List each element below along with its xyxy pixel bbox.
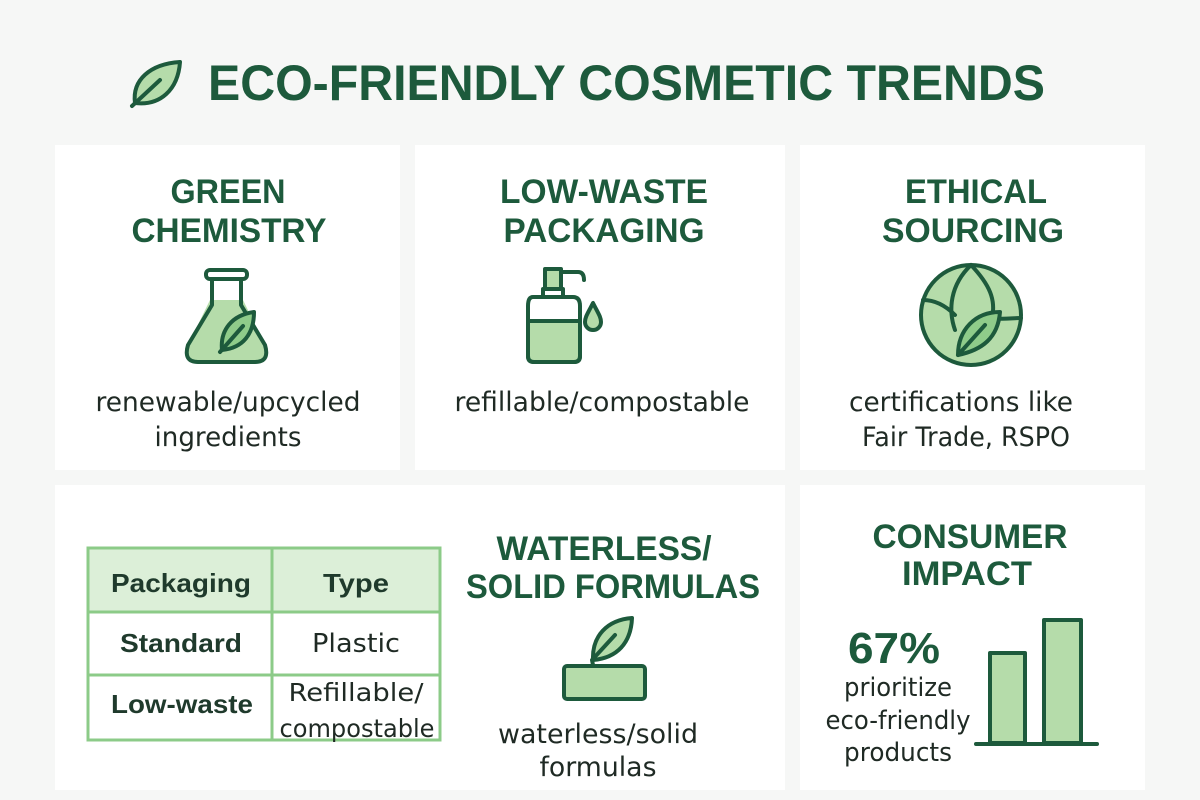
- panel: consumer impact: [800, 485, 1145, 790]
- heading: ethical sourcing: SOURCING: [882, 212, 1064, 250]
- text: low-waste: refillable/compostable: [454, 387, 750, 418]
- panel: ethical sourcing: [800, 145, 1145, 470]
- heading: consumer impact: IMPACT: [902, 555, 1032, 593]
- text: prioritize: eco-friendly: [826, 706, 970, 736]
- text: prioritize: prioritize: [844, 673, 952, 703]
- heading: green chemistry: GREEN: [170, 173, 286, 211]
- panel: green chemistry: [55, 145, 400, 470]
- table: packaging comparison: Standard: [120, 628, 242, 658]
- heading: waterless: WATERLESS/: [496, 530, 712, 568]
- table: packaging comparison: Type: [323, 568, 389, 598]
- icon: title leaf: [132, 62, 180, 106]
- heading: green chemistry: CHEMISTRY: [132, 212, 327, 250]
- text: prioritize: products: [844, 738, 952, 768]
- title: ECO-FRIENDLY COSMETIC TRENDS: [208, 55, 1045, 111]
- icon: solid bar with leaf: [564, 618, 645, 699]
- panel: low-waste packaging: [415, 145, 785, 470]
- text: green chemistry: renewable/upcycled: [96, 387, 360, 418]
- icon: flask with leaf: [187, 270, 266, 362]
- heading: waterless: SOLID FORMULAS: [466, 568, 760, 606]
- table: packaging comparison: Plastic: [312, 629, 400, 659]
- text: waterless: waterless/solid: [498, 719, 698, 750]
- table: packaging comparison: Refillable/: [288, 678, 424, 707]
- table: packaging comparison: Packaging: [111, 568, 251, 598]
- table: packaging comparison: compostable: [280, 714, 434, 743]
- text: waterless: formulas: [540, 752, 656, 783]
- heading: green chemistry: [132, 173, 327, 250]
- table: packaging comparison: [88, 548, 440, 743]
- icon: globe with leaf: [921, 265, 1021, 365]
- text: waterless: [498, 719, 698, 783]
- text: ethical: [849, 387, 1073, 453]
- icon: pump bottle: [528, 269, 601, 362]
- heading: ethical sourcing: [882, 173, 1064, 250]
- table: packaging comparison: Low-waste: [111, 689, 253, 719]
- heading: ethical sourcing: ETHICAL: [905, 173, 1047, 211]
- text: ethical: certifications like: [849, 387, 1073, 418]
- stat: 67%: 67%: [848, 624, 940, 673]
- text: prioritize: [826, 673, 970, 768]
- text: ethical: Fair Trade, RSPO: [862, 422, 1070, 453]
- heading: waterless: [466, 530, 760, 606]
- panel: packaging table and waterless: [55, 485, 785, 790]
- heading: consumer impact: CONSUMER: [872, 518, 1068, 556]
- text: green chemistry: [96, 387, 360, 453]
- heading: low-waste packaging: [500, 173, 708, 250]
- heading: low-waste packaging: LOW-WASTE: [500, 173, 708, 211]
- bar chart: [976, 620, 1097, 744]
- heading: consumer impact: [872, 518, 1068, 593]
- heading: low-waste packaging: PACKAGING: [504, 212, 704, 250]
- text: green chemistry: ingredients: [154, 422, 302, 453]
